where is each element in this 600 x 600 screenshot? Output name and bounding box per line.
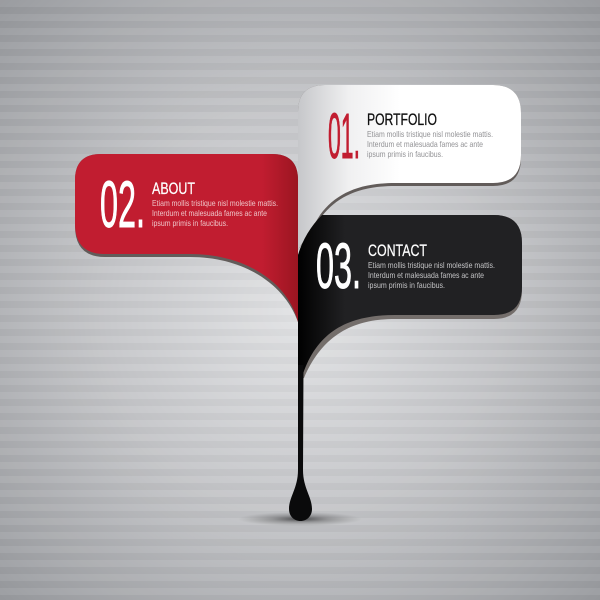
body text: contact: Interdum et malesuada fames ac ante (368, 271, 484, 280)
heading: portfolio: PORTFOLIO (367, 110, 437, 129)
panel shadow: portfolio (298, 85, 521, 250)
panel shadow: contact (298, 215, 522, 380)
body text: contact: ipsum primis in faucibus. (368, 281, 445, 290)
panel: portfolio: 01. (328, 100, 360, 172)
body text: about: Interdum et malesuada fames ac ante (152, 209, 267, 218)
body text: portfolio (367, 130, 493, 159)
number 03: 03. (316, 230, 361, 302)
panel body: contact (298, 215, 522, 380)
panel body: portfolio (298, 85, 521, 250)
panel: about: 02. (100, 167, 145, 241)
panel: about (75, 154, 298, 322)
panel: portfolio (298, 85, 521, 250)
body text: portfolio: ipsum primis in faucibus. (367, 150, 443, 159)
stem and droplet (289, 365, 312, 521)
body text: about: ipsum primis in faucibus. (152, 219, 228, 228)
heading: about: ABOUT (152, 179, 195, 198)
panel body: about (75, 154, 298, 322)
panel: contact (298, 215, 522, 380)
body text: contact: Etiam mollis tristique nisl molestie mattis. (368, 261, 495, 270)
panel shadow: about (75, 154, 298, 322)
body text: contact (368, 261, 495, 290)
heading: contact: CONTACT (368, 241, 427, 260)
body text: about (152, 199, 278, 228)
body text: portfolio: Etiam mollis tristique nisl molestie mattis. (367, 130, 493, 139)
ground shadow (238, 512, 362, 526)
body text: portfolio: Interdum et malesuada fames ac ante (367, 140, 483, 149)
body text: about: Etiam mollis tristique nisl molestie mattis. (152, 199, 278, 208)
